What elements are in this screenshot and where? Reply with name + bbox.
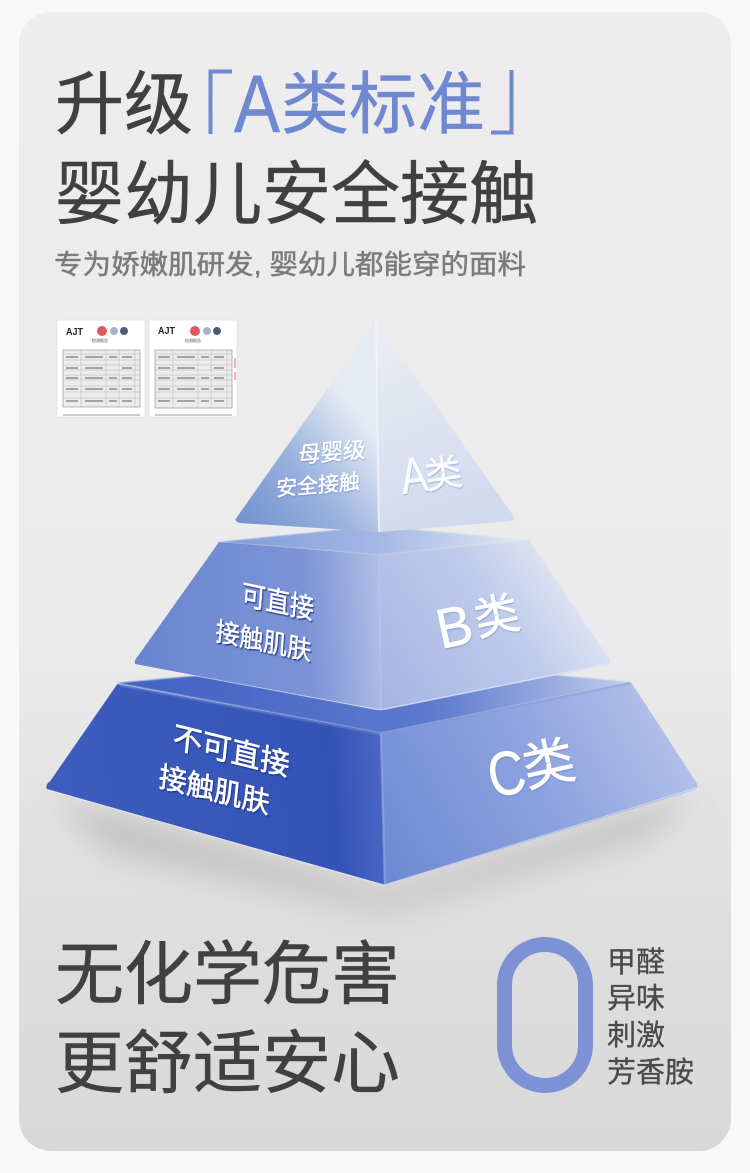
report 2: 检测报告	[185, 337, 201, 343]
label: direct skin contact	[215, 578, 315, 667]
hazard list: 异味	[607, 982, 665, 1015]
label: class C: 类	[517, 731, 580, 799]
heading: no chemical hazard	[55, 936, 400, 1102]
heading: no chemical hazard: 无化学危害	[55, 936, 400, 1013]
test report documents	[57, 320, 237, 417]
label: maternal and infant grade	[276, 437, 366, 501]
label: direct skin contact: 接触肌肤	[215, 617, 312, 667]
report 1: AJT	[66, 327, 83, 338]
label: class B	[431, 587, 524, 661]
title line 1	[55, 59, 512, 150]
label: class A: 类	[422, 451, 465, 497]
label: not for direct skin contact: 接触肌肤	[157, 761, 271, 821]
hazard list: 芳香胺	[607, 1056, 694, 1089]
hazard list: 甲醛	[607, 946, 665, 979]
title line 1: A	[234, 59, 280, 150]
label: class B: B	[431, 592, 478, 661]
pyramid	[46, 320, 698, 910]
tier C	[46, 659, 698, 885]
heading: no chemical hazard: 更舒适安心	[55, 1025, 400, 1102]
heading: title	[55, 59, 538, 233]
report 2: AJT	[158, 326, 175, 337]
label: class A: A	[397, 445, 432, 505]
ground shadow	[48, 792, 698, 910]
tier A	[236, 320, 514, 532]
report 2	[149, 320, 237, 417]
label: not for direct skin contact: 不可直接	[171, 720, 291, 783]
title line 1: 类标准	[281, 67, 485, 143]
report 1: 检测报告	[92, 337, 108, 343]
label: not for direct skin contact	[157, 720, 291, 821]
label: maternal and infant grade: 安全接触	[276, 470, 360, 501]
tier B	[135, 526, 610, 710]
label: direct skin contact: 可直接	[241, 578, 315, 626]
label: class C: C	[482, 737, 532, 812]
subtitle: 专为娇嫩肌研发, 婴幼儿都能穿的面料	[54, 250, 526, 280]
label: class B: 类	[469, 587, 524, 646]
hazard list	[607, 946, 694, 1089]
report 1	[57, 320, 145, 417]
big zero	[504, 944, 586, 1086]
title line 1: 升级	[55, 66, 193, 143]
label: class A	[397, 445, 465, 505]
label: maternal and infant grade: 母婴级	[298, 437, 366, 468]
hazard list: 刺激	[607, 1019, 665, 1052]
label: class C	[482, 731, 580, 812]
title line 2: 婴幼儿安全接触	[55, 156, 538, 233]
